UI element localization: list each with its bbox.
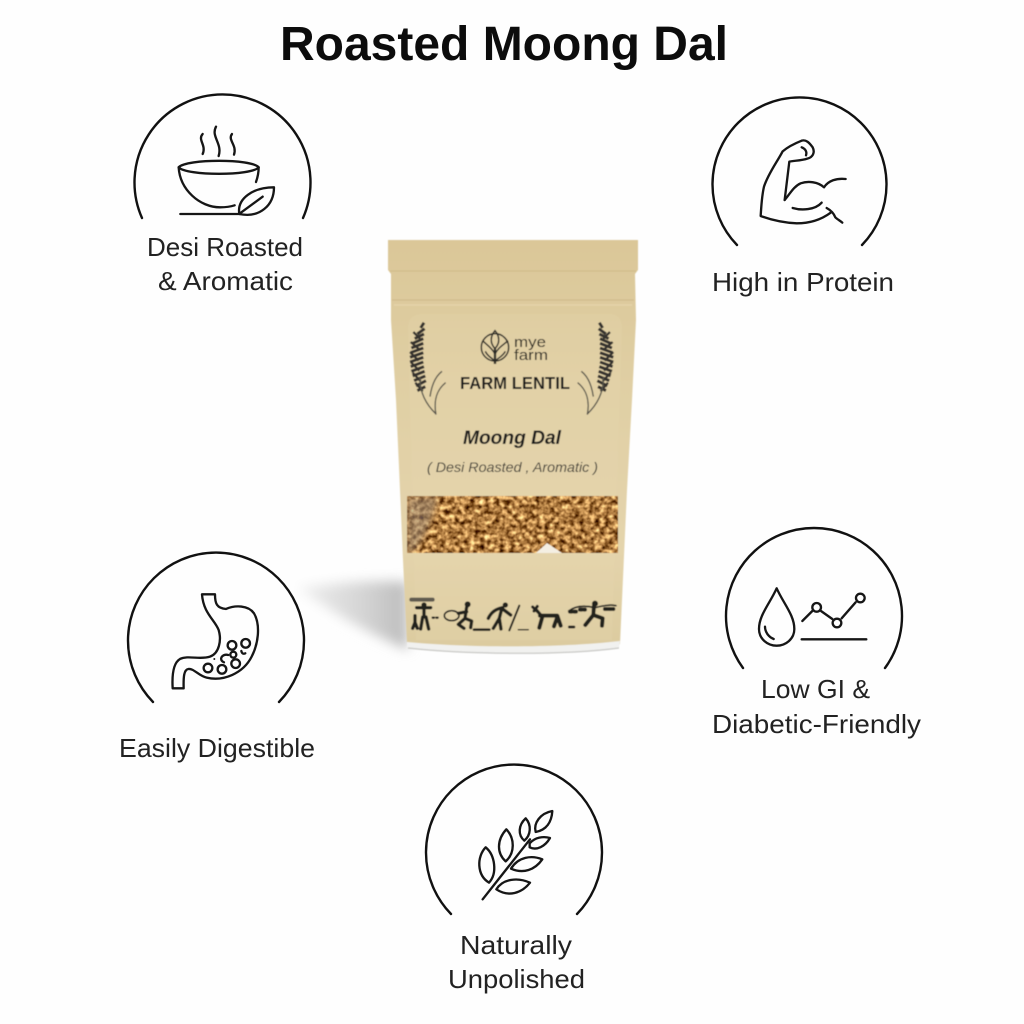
feature: naturally unpolished	[426, 765, 602, 994]
wheat left	[410, 323, 446, 415]
wheat right	[578, 323, 613, 415]
logo mark	[481, 331, 509, 364]
feature: high in protein	[712, 97, 894, 297]
label: desi roasted: Desi Roasted	[147, 232, 303, 262]
icon: leafy sprig	[479, 811, 552, 899]
brand name farm: farm	[514, 348, 548, 364]
tribal figures frieze	[411, 600, 616, 630]
brand name mye: mye	[514, 335, 546, 351]
feature: low gi	[712, 528, 921, 739]
window with roasted dal	[407, 496, 618, 553]
pouch brand wrapper	[410, 323, 613, 415]
label: aromatic: & Aromatic	[158, 266, 293, 296]
label: naturally: Naturally	[460, 930, 572, 960]
pouch seams	[390, 271, 636, 305]
label: diabetic friendly: Diabetic-Friendly	[712, 709, 921, 739]
pouch body	[388, 240, 638, 649]
label: easily digestible: Easily Digestible	[119, 733, 315, 763]
pouch descriptor: ( Desi Roasted , Aromatic )	[427, 459, 598, 475]
shadow of pouch	[298, 581, 408, 650]
bottom gusset	[407, 641, 620, 653]
label: high in protein: High in Protein	[712, 267, 894, 297]
icon ring: stomach	[128, 553, 304, 702]
title: Roasted Moong Dal	[280, 18, 728, 71]
icon: drop and trend line	[759, 588, 866, 646]
gusset lower edge	[408, 648, 619, 653]
icon: flexed arm	[761, 140, 846, 223]
product pouch	[388, 240, 638, 653]
icon: steaming bowl with leaf	[179, 127, 274, 215]
icon: stomach with grains	[172, 594, 258, 688]
pouch product name: Moong Dal	[463, 427, 562, 449]
icon ring: wheat sprig	[426, 765, 602, 914]
icon ring: low gi	[726, 528, 902, 668]
label: unpolished: Unpolished	[448, 964, 585, 994]
inner panel	[408, 314, 622, 640]
feature: easily digestible	[119, 553, 315, 763]
pouch heading farm lentil: FARM LENTIL	[460, 373, 570, 393]
icon ring: muscle	[712, 97, 886, 245]
icon ring: bowl	[134, 94, 310, 218]
label: low gi: Low GI &	[761, 674, 870, 704]
feature: desi roasted and aromatic	[134, 94, 310, 296]
